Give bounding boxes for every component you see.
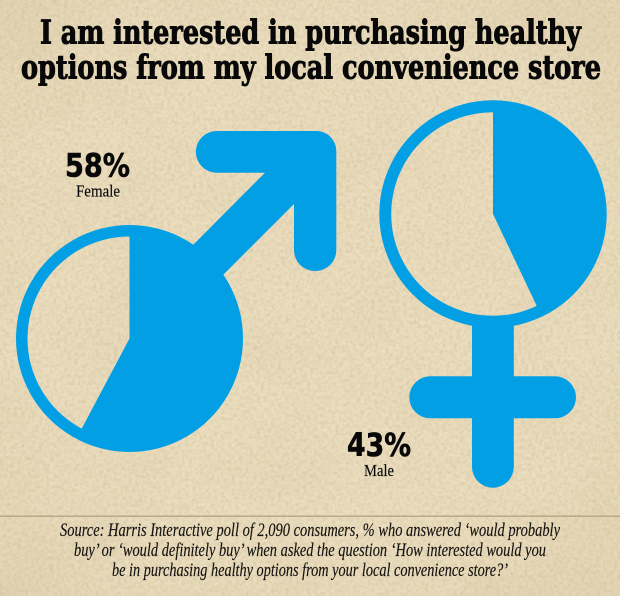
58% value: 58% — [65, 146, 130, 184]
female pie slice: 43% — [493, 107, 600, 311]
43% value: 43% — [347, 426, 411, 464]
female circle ring — [379, 100, 607, 328]
cross — [409, 320, 576, 488]
source note — [60, 521, 561, 581]
male symbol: pie chart with arrow — [16, 131, 336, 452]
arrow — [190, 131, 336, 278]
Male caption: Male — [364, 461, 394, 480]
female symbol: pie chart with cross — [379, 100, 607, 488]
Female caption: Female — [76, 182, 120, 200]
title — [21, 12, 601, 86]
male label — [347, 426, 411, 480]
male circle ring — [16, 225, 243, 452]
source note: be in purchasing healthy options from your local convenience store?’ — [112, 561, 508, 581]
female label — [65, 146, 130, 200]
male pie slice: 58% — [80, 232, 236, 445]
